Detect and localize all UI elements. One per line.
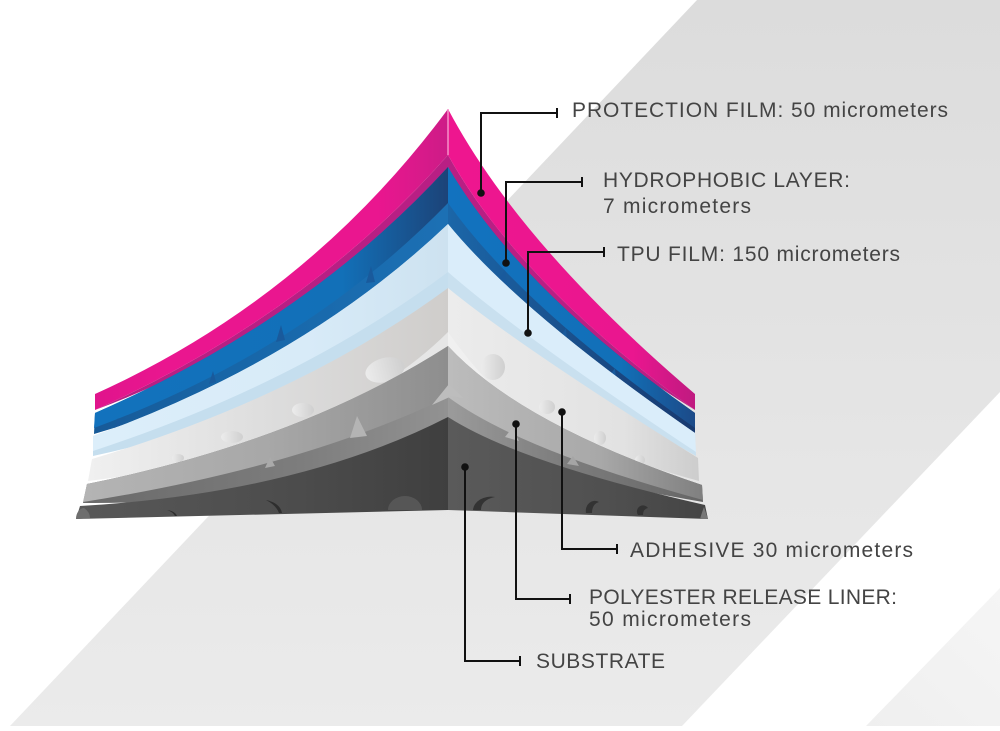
layered film diagram: [76, 109, 708, 519]
callout: protection film: [477, 99, 948, 197]
callout: protection film: PROTECTION FILM: 50 micrometers: [572, 99, 948, 122]
callout: TPU film: [524, 243, 900, 337]
callout: substrate: SUBSTRATE: [536, 650, 665, 673]
callout: hydrophobic layer: HYDROPHOBIC LAYER:: [603, 169, 850, 192]
layer: substrate (dark gray): [76, 417, 708, 519]
callout: adhesive: [558, 408, 913, 562]
callout: TPU film: TPU FILM: 150 micrometers: [617, 243, 900, 266]
callout: polyester release liner: POLYESTER RELEASE LINER:: [589, 586, 897, 609]
layer: hydrophobic layer (blue): [94, 167, 695, 434]
layer: polyester release liner (mid gray): [83, 346, 703, 503]
layer: protection film (pink): [95, 109, 695, 410]
callout: hydrophobic layer: [502, 169, 850, 267]
layer: TPU film (light blue): [93, 224, 696, 456]
callout: hydrophobic layer: 7 micrometers: [603, 195, 751, 218]
callout: substrate: [461, 463, 665, 673]
layer: adhesive (light gray): [88, 288, 699, 481]
callout: polyester release liner: [512, 420, 897, 631]
callout: adhesive: ADHESIVE 30 micrometers: [630, 539, 913, 562]
callout: polyester release liner: 50 micrometers: [589, 608, 751, 631]
